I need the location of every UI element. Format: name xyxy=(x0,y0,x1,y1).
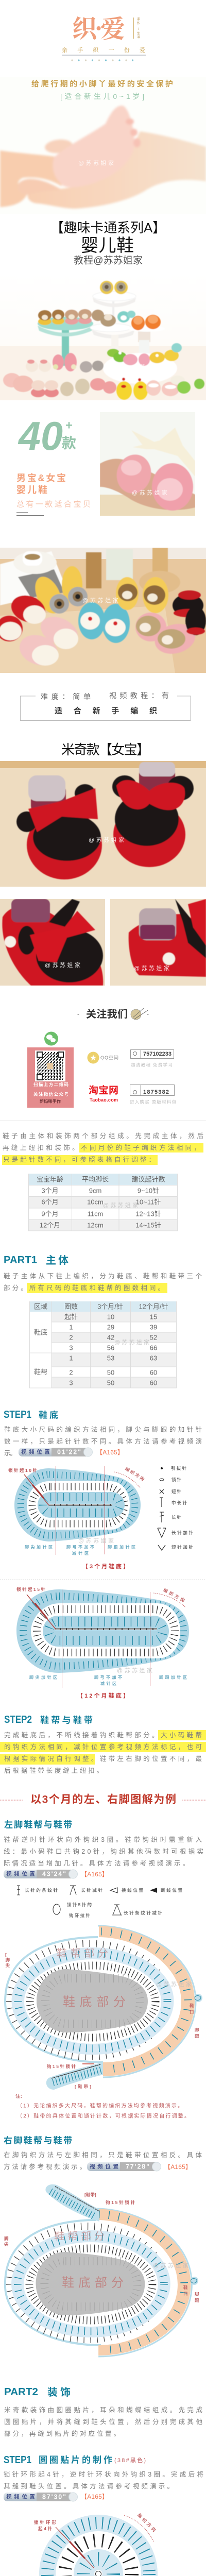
crochet chart: left foot upper: 口 xyxy=(190,2009,194,2014)
notes: left foot xyxy=(15,2093,190,2120)
table: stitches per round: 60 xyxy=(150,1368,157,1377)
table: stitches per round: 56 xyxy=(107,1344,114,1352)
table: stitches per round xyxy=(29,1301,177,1388)
crochet chart: 3-month sole: 锁针起10针 xyxy=(8,1468,37,1473)
logo: 织爱: 生 xyxy=(137,31,140,36)
QQ zone contact: 超清教程 免费学习 xyxy=(131,1062,173,1067)
heading: PART2 xyxy=(4,2386,71,2398)
table: stitches per round: 3个月/针 xyxy=(97,1302,123,1311)
logo: 织爱: 亲手织一份爱 xyxy=(62,46,145,54)
table: stitches per round: 42 xyxy=(107,1333,114,1342)
text block: intro xyxy=(2,1132,203,1165)
table: age and foot length: 14~15针 xyxy=(135,1221,161,1229)
icon: wechat xyxy=(44,1031,58,1046)
text block: part 2 xyxy=(4,2406,202,2437)
text block: intro: 再缝上纽扣和装饰。不同月份的鞋子编织方法相同， xyxy=(3,1144,200,1151)
table: age and foot length: 9个月 xyxy=(41,1210,59,1218)
heading: PART2: PART2 xyxy=(4,2386,38,2398)
table: stitches per round: 60 xyxy=(150,1379,157,1387)
crochet chart: left foot upper: 脚 xyxy=(195,2027,199,2032)
notes: left foot: 注： xyxy=(15,2093,25,2099)
table: age and foot length: 12cm xyxy=(87,1221,104,1229)
Taobao contact: 1875382 xyxy=(143,1089,169,1095)
legend: stitch symbols: 长针加针 xyxy=(171,1530,193,1535)
crochet chart: left foot upper: 鞋底部分 xyxy=(63,1995,126,2009)
table: stitches per round: 29 xyxy=(107,1323,114,1331)
crochet chart: right foot upper: 尖 xyxy=(4,2242,9,2247)
text block: part 1: 部分。所有尺码的鞋底和鞋帮的圈数相同。 xyxy=(4,1284,164,1292)
QQ zone contact xyxy=(88,1050,174,1067)
text block: intro: 鞋子由主体和装饰两个部分组成。先完成主体，然后 xyxy=(3,1132,203,1140)
heading: step 2 upper and strap: STEP2 xyxy=(4,1714,32,1725)
crochet chart: 12-month sole xyxy=(16,1587,189,1688)
heading: step 1 sole: STEP1 xyxy=(4,1409,31,1420)
table: age and foot length: 10~11针 xyxy=(136,1198,161,1206)
legend: stitch symbols: 短针加针 xyxy=(171,1545,193,1550)
heading: step 2 upper and strap xyxy=(4,1714,93,1725)
40+ styles text block: 款 xyxy=(62,435,76,451)
crochet chart: 12-month sole: 脚弓不加不 xyxy=(94,1674,122,1680)
table: stitches per round: 1 xyxy=(69,1323,73,1331)
heading: patch xyxy=(4,2454,146,2466)
table: stitches per round: 3 xyxy=(69,1344,73,1352)
heading: patch: STEP1 xyxy=(4,2454,31,2466)
QQ zone contact: QQ空间 xyxy=(100,1055,118,1060)
text block: step 2: 完成鞋底后，不断线接着钩织鞋帮部分。大小码鞋帮 xyxy=(4,1731,202,1739)
video position bar 01'22" xyxy=(19,1448,93,1456)
text block: step 2: 根据实际情况自行调整。鞋带左右脚的位置不同，最 xyxy=(4,1755,202,1762)
heading: PART2: 装饰 xyxy=(47,2386,71,2398)
text block: part 1: 鞋子主体从下往上编织，分为鞋底、鞋帮和鞋带三个 xyxy=(4,1272,202,1280)
crochet chart: left foot upper: 鞋 xyxy=(190,2003,194,2008)
difficulty info box: 适合新手编织 xyxy=(55,706,157,715)
legend: upper symbols: 长针减针 xyxy=(81,1888,102,1893)
crochet chart: right foot upper: [鞋带] xyxy=(84,2192,96,2197)
main title: 【趣味卡通系列A】 xyxy=(50,220,166,235)
main title xyxy=(50,220,166,266)
crochet chart: 3-month sole xyxy=(8,1466,145,1556)
text block: right foot: 右脚钩织方法与左脚相同，只是鞋带位置相反。具体 xyxy=(4,2151,202,2159)
crochet chart: 3-month sole: 脚弓不加不 xyxy=(66,1545,94,1550)
table: stitches per round: 鞋底 xyxy=(34,1328,47,1336)
legend: upper symbols: 换线位置 xyxy=(122,1888,143,1893)
caption: 3-month sole: 【3个月鞋底】 xyxy=(82,1563,129,1570)
crochet chart: 3-month sole: 脚跟加针区 xyxy=(108,1545,135,1550)
notes: left foot: （1）无论编织多大尺码，鞋帮的编织方法均参考视频演示。 xyxy=(17,2102,183,2109)
crochet chart: round patch: 编织方向 xyxy=(136,2512,157,2533)
text block: step 1: 示。 xyxy=(4,1450,16,1457)
text block: left foot: 鞋帮逆时针环状向外钩织3圈。鞋带钩织时需重新入 xyxy=(4,1836,202,1843)
table: stitches per round: 2 xyxy=(69,1333,73,1342)
heading: follow us with yarn icon: - xyxy=(147,1010,149,1018)
caption: 12-month sole: 【12个月鞋底】 xyxy=(77,1692,129,1699)
crochet chart: right foot upper: 口 xyxy=(183,2291,188,2296)
crochet chart: left foot upper: [ xyxy=(5,1952,7,1957)
table: stitches per round: 52 xyxy=(150,1333,157,1342)
legend: upper symbols xyxy=(17,1886,182,1918)
photo: Mickey shoes close-up xyxy=(0,761,206,887)
crochet chart: right foot upper: 脚 xyxy=(4,2236,9,2241)
text block: part 2: 部分，再缝到贴片的对应位置。 xyxy=(4,2430,120,2437)
difficulty info box: 视频教程：有 xyxy=(109,691,169,700)
table: stitches per round: @苏苏姐家 xyxy=(114,1338,149,1346)
table: age and foot length: 11cm xyxy=(88,1210,103,1218)
crochet chart: 12-month sole: 锁针起15针 xyxy=(16,1587,45,1592)
QQ zone contact: ★ xyxy=(90,1054,97,1061)
text block: patch: 锁针环形起4针，逆时针环状向外钩织3圈。完成后将 xyxy=(4,2470,203,2478)
crochet chart: left foot upper: [鞋带] xyxy=(75,2084,91,2089)
legend: stitch symbols: 锁针 xyxy=(171,1477,181,1482)
photo: Mickey shoe side view: @苏苏姐家 xyxy=(134,964,169,972)
photo: shoes on cake stands: @苏苏姐家 xyxy=(132,363,168,370)
crochet chart: 3-month sole: 减针区 xyxy=(72,1551,89,1556)
photo: pink shoes in hand: @苏苏姐家 xyxy=(132,489,167,496)
table: stitches per round: 39 xyxy=(150,1323,157,1331)
Taobao contact: Taobao.com xyxy=(90,1097,118,1103)
legend: upper symbols: 锁针5针的 xyxy=(67,1902,92,1907)
hero photo: baby foot in hand xyxy=(0,104,206,210)
table: stitches per round: 圈数 xyxy=(64,1302,78,1311)
legend: stitch symbols: 长针 xyxy=(171,1515,181,1520)
40+ styles text block: + xyxy=(65,418,73,433)
heading: Mickey style: 米奇款【女宝】 xyxy=(61,742,150,757)
40+ styles text block xyxy=(16,413,91,516)
legend: stitch symbols: 中长针 xyxy=(171,1500,187,1505)
heading: follow us with yarn icon: - xyxy=(77,1010,79,1018)
video position bar 43'24" xyxy=(4,1870,77,1878)
video position bar 43'24": 视频位置 xyxy=(6,1870,35,1877)
text block: part 2: 圆圈贴片，并将其缝到鞋头位置，然后分别完成其他 xyxy=(4,2418,202,2426)
video reference A165: 【A165】 xyxy=(164,2163,192,2171)
crochet chart: left foot upper: 尖 xyxy=(5,1963,10,1968)
logo: 织爱: 手 xyxy=(137,17,140,21)
table: stitches per round: 鞋帮 xyxy=(34,1368,47,1376)
table: stitches per round: 66 xyxy=(150,1344,157,1352)
text block: step 1: 数一样，只是起针针数不同。具体方法请参考视频演 xyxy=(4,1437,202,1445)
crochet chart: left foot upper xyxy=(5,1926,202,2090)
40+ styles text block: 男宝&女宝 xyxy=(16,472,66,483)
table: stitches per round: 10 xyxy=(107,1313,114,1321)
crochet chart: 3-month sole: @苏苏姐家 xyxy=(78,1537,114,1544)
text block: patch: 其缝到鞋头位置。具体方法请参考视频演示。 xyxy=(4,2482,174,2490)
table: age and foot length: 6个月 xyxy=(41,1198,59,1206)
logo: 织爱: 活 xyxy=(137,35,140,39)
table: age and foot length xyxy=(28,1174,178,1231)
heading: PART1 xyxy=(4,1255,68,1266)
text block: left foot: 际情况适当增加几针。具体方法请参考视频演示。 xyxy=(4,1859,189,1867)
crochet chart: left foot upper: 跟 xyxy=(195,2033,199,2039)
crochet chart: left foot upper: 鞋帮部分 xyxy=(57,1947,108,1959)
logo: 织爱: 作 xyxy=(137,21,140,25)
crochet chart: right foot upper: 鞋 xyxy=(183,2285,188,2290)
text block: right foot xyxy=(4,2151,202,2171)
video reference A165: 【A165】 xyxy=(81,2493,108,2500)
video reference A165: 【A165】 xyxy=(81,1871,108,1878)
crochet chart: 12-month sole: 脚跟加针区 xyxy=(159,1674,187,1680)
table: stitches per round: 起针 xyxy=(64,1313,78,1321)
QQ zone contact: 757102233 xyxy=(143,1051,171,1057)
logo: 织爱: / xyxy=(138,28,139,31)
legend: upper symbols: 断线位置 xyxy=(161,1888,182,1893)
video position bar 87'30" xyxy=(4,2493,77,2501)
video position bar 87'30": 视频位置 xyxy=(6,2494,35,2500)
table: stitches per round: 53 xyxy=(107,1354,114,1362)
heading: right foot: 右脚鞋帮与鞋带 xyxy=(4,2136,72,2145)
text block: intro: 只是起针数不同，可参照表格自行调整： xyxy=(3,1156,155,1163)
video position bar 77'28": 视频位置 xyxy=(90,2163,118,2170)
Taobao contact: 淘宝网 xyxy=(89,1084,118,1096)
photo: table with cartoon shoes xyxy=(0,548,206,673)
crochet chart: right foot upper xyxy=(4,2184,199,2357)
heading: follow us with yarn icon xyxy=(77,1008,149,1020)
text block: right foot: 方法请参考视频演示。 xyxy=(4,2163,86,2171)
table: stitches per round: 50 xyxy=(107,1379,114,1387)
difficulty info box: 难度：简单 xyxy=(41,692,91,701)
text block: part 2: 米奇款装饰由圆圈贴片，耳朵和蝴蝶结组成。先完成 xyxy=(4,2406,202,2414)
table: age and foot length: 10cm xyxy=(87,1198,104,1206)
video position bar 43'24": 43'24" xyxy=(42,1870,66,1877)
crochet chart: right foot upper: 跟 xyxy=(195,2298,199,2303)
text block: patch xyxy=(4,2470,203,2490)
crochet chart: right foot upper: 钩15针锁针 xyxy=(106,2200,135,2205)
Taobao contact xyxy=(89,1084,176,1105)
table: stitches per round: 15 xyxy=(150,1313,157,1321)
photo: Mickey shoe left view xyxy=(0,899,105,986)
main title: 教程@苏苏姐家 xyxy=(74,255,143,266)
heading: left foot: 左脚鞋帮与鞋带 xyxy=(4,1820,72,1830)
watermark: @苏苏姐家 xyxy=(78,159,114,166)
panel: QR code card xyxy=(27,1047,74,1108)
40+ styles text block: 总有一款适合宝贝 xyxy=(16,500,91,509)
photo: Mickey shoes close-up: @苏苏姐家 xyxy=(89,836,124,843)
table: stitches per round: 3 xyxy=(69,1379,73,1387)
photo: table with cartoon shoes: @苏苏姐家 xyxy=(82,597,118,604)
panel: QR code card: 关注微信公众号 xyxy=(33,1092,68,1097)
crochet chart: left foot upper: 脚 xyxy=(5,1957,10,1962)
legend: stitch symbols xyxy=(158,1466,193,1550)
text block: step 2 xyxy=(0,1730,206,1774)
photo: Mickey shoe side view xyxy=(110,899,206,986)
crochet chart: right foot upper: 鞋底部分 xyxy=(62,2276,124,2290)
text block: step 1 xyxy=(4,1426,202,1457)
panel: QR code card: 扫描上方二维码 xyxy=(33,1082,68,1087)
crochet chart: round patch: 起4针 xyxy=(38,2526,52,2531)
heading: step 1 sole xyxy=(4,1409,58,1420)
text block: part 1 xyxy=(4,1272,202,1293)
heading: patch: 圆圈贴片的制作 xyxy=(39,2455,112,2465)
crochet chart: 3-month sole: 脚尖加针区 xyxy=(25,1545,53,1550)
Taobao contact: 进入购买 原版材料包 xyxy=(130,1099,176,1105)
crochet chart: right foot upper: 鞋帮部分 xyxy=(54,2230,105,2242)
video position bar 01'22": 视频位置 xyxy=(21,1449,50,1455)
crochet chart: 12-month sole: 编织方向 xyxy=(162,1587,186,1603)
crochet chart: left foot upper: 钩15针锁针 xyxy=(47,2064,76,2069)
table: age and foot length: 9~10针 xyxy=(138,1187,159,1194)
main title: 婴儿鞋 xyxy=(81,236,134,256)
heading: patch: (38#黑色) xyxy=(114,2456,146,2464)
table: age and foot length: 9cm xyxy=(89,1187,101,1194)
photo: pink shoes in hand xyxy=(100,412,195,516)
table: age and foot length: 3个月 xyxy=(41,1187,59,1194)
notes: left foot: （2）鞋带的具体位置和锁针针数，可根据实际情况自行调整。 xyxy=(17,2112,190,2120)
tagline: [适合新生儿0~1岁] xyxy=(60,92,144,100)
tagline xyxy=(31,79,173,100)
table: age and foot length: 12~13针 xyxy=(135,1210,161,1218)
table: stitches per round: 12个月/针 xyxy=(139,1302,168,1311)
heading: step 2 upper and strap: 鞋帮与鞋带 xyxy=(40,1716,93,1725)
difficulty info box xyxy=(21,691,191,720)
heading: step 1 sole: 鞋底 xyxy=(39,1410,58,1420)
video reference A165: 【A165】 xyxy=(96,1449,124,1456)
heading: follow us with yarn icon: 关注我们 xyxy=(86,1008,128,1020)
table: stitches per round: 50 xyxy=(107,1368,114,1377)
video position bar 77'28": 77'28" xyxy=(126,2163,149,2170)
40+ styles text block: 40 xyxy=(18,413,63,459)
text block: step 1: 鞋底大小尺码的编织方法相同，脚尖与脚跟的加针针 xyxy=(4,1426,202,1433)
table: stitches per round: 2 xyxy=(69,1368,73,1377)
table: age and foot length: 平均脚长 xyxy=(82,1176,109,1183)
legend: upper symbols: 钩牙拉针 xyxy=(69,1913,90,1918)
legend: upper symbols: 长针的条纹针 xyxy=(25,1888,58,1893)
table: age and foot length: 建议起针数 xyxy=(131,1176,165,1183)
tagline: 给爬行期的小脚丫最好的安全保护 xyxy=(31,79,173,89)
photo: Mickey shoe left view: @苏苏姐家 xyxy=(45,961,80,969)
logo: 织爱: 织·爱 xyxy=(72,9,125,44)
text block: step 2: 的钩织方法相同，减针位置参考视频方法标记，也可 xyxy=(4,1743,202,1751)
table: age and foot length: @苏苏姐家 xyxy=(103,1201,138,1209)
video position bar 77'28" xyxy=(87,2162,161,2171)
text block: step 2: 后根据鞋带长度缝上纽扣。 xyxy=(4,1767,103,1774)
crochet chart: 12-month sole: @苏苏姐家 xyxy=(117,1667,152,1674)
text block: left foot xyxy=(4,1836,203,1867)
heading: PART1: PART1 xyxy=(4,1255,37,1266)
text block: left foot: 线：最小码鞋口共钩20针，钩织其他码数时可根据实 xyxy=(4,1848,203,1855)
crochet chart: round patch: 锁针环形 xyxy=(34,2520,56,2525)
heading: red example title: 以3个月的左、右脚图解为例 xyxy=(30,1794,176,1805)
crochet chart: right foot upper: 脚 xyxy=(195,2292,199,2297)
table: age and foot length: 宝宝年龄 xyxy=(37,1176,63,1183)
photo: shoes on cake stands xyxy=(0,280,206,400)
crochet chart: right foot upper: @苏苏姐家 xyxy=(153,2262,188,2269)
crochet chart: 12-month sole: 脚尖加针区 xyxy=(29,1674,57,1680)
crochet chart: 12-month sole: 减针区 xyxy=(100,1681,116,1686)
table: stitches per round: 区域 xyxy=(34,1302,47,1311)
video position bar 01'22": 01'22" xyxy=(57,1449,81,1456)
40+ styles text block: 婴儿鞋 xyxy=(16,485,47,495)
legend: stitch symbols: 短针 xyxy=(171,1489,181,1494)
logo: 织爱 xyxy=(62,9,146,61)
table: age and foot length: 12个月 xyxy=(40,1221,60,1229)
crochet chart: left foot upper: @苏苏姐家 xyxy=(156,1980,192,1988)
table: stitches per round: 1 xyxy=(69,1354,73,1362)
legend: upper symbols: 长针条纹针减针 xyxy=(124,1910,162,1916)
video position bar 87'30": 87'30" xyxy=(42,2494,66,2501)
table: stitches per round: 63 xyxy=(150,1354,157,1362)
crochet chart: 3-month sole: 编织方向 xyxy=(124,1466,145,1482)
crochet chart: round patch xyxy=(34,2512,158,2576)
panel: QR code card: 新妈咪手作 xyxy=(40,1098,61,1104)
legend: stitch symbols: 引拔针 xyxy=(171,1466,186,1471)
heading: PART1: 主体 xyxy=(46,1255,68,1266)
